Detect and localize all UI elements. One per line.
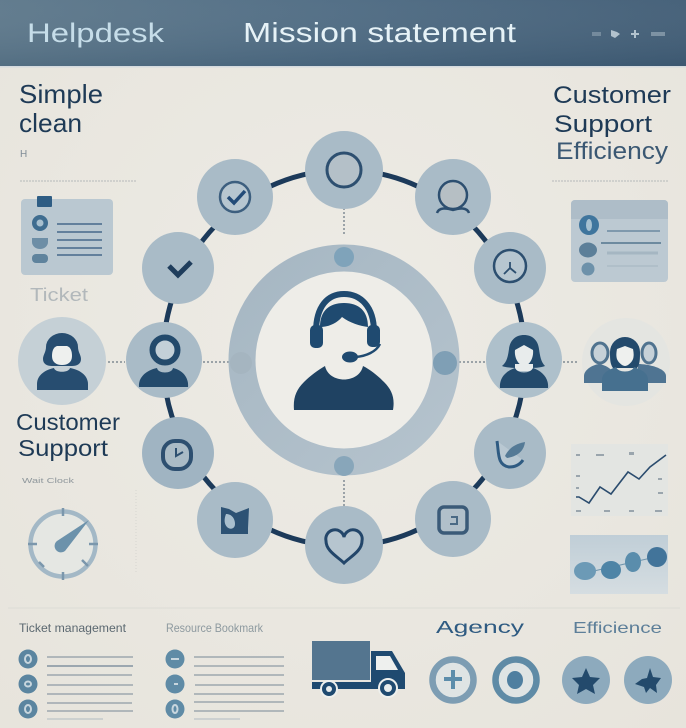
heading: Customer Support Efficiency: Customer	[553, 82, 671, 109]
node: check mark	[142, 232, 214, 304]
header title: Helpdesk: Helpdesk	[27, 18, 165, 48]
bottom list: management: Ticket management	[19, 621, 127, 635]
node: check circle	[197, 159, 273, 235]
label: Ticket: Ticket	[30, 285, 88, 305]
bottom badge: shield	[496, 660, 536, 700]
node: top shield	[305, 131, 383, 209]
label: Agency: Agency	[436, 617, 524, 637]
delivery truck icon	[312, 641, 405, 697]
heading: Customer Support: Customer	[16, 409, 120, 435]
bottom badge: star	[562, 656, 610, 704]
header bar	[0, 0, 686, 68]
blob chart panel	[570, 535, 668, 594]
customer avatar left	[18, 317, 106, 405]
outer orbit line	[163, 170, 525, 546]
heading: Customer Support Efficiency: Efficiency	[556, 138, 668, 165]
heading: Customer Support	[16, 409, 120, 461]
node: person right	[486, 322, 562, 398]
central ring	[242, 258, 446, 462]
bottom list: resources	[166, 621, 284, 719]
dotted divider left	[20, 180, 137, 182]
node: clock	[474, 232, 546, 304]
small glyph: H	[20, 149, 27, 160]
support dashboard card	[571, 200, 668, 282]
node: leaf badge	[197, 482, 273, 558]
heading: Customer Support Efficiency: Support	[554, 111, 652, 138]
bottom list: management	[18, 621, 133, 719]
bottom list: resources: Resource Bookmark	[166, 621, 264, 635]
central diagram	[108, 131, 578, 584]
small caption: Wait Clock	[22, 478, 75, 485]
node: clock badge	[142, 417, 214, 489]
ring nodes	[230, 247, 457, 476]
label: Efficience: Efficience	[573, 620, 662, 637]
heading: Customer Support: Support	[18, 435, 109, 461]
dotted guide	[135, 490, 137, 572]
bottom badge: plus	[432, 660, 474, 700]
gauge icon	[28, 508, 98, 580]
ticket card	[21, 196, 113, 275]
header title: Mission statement: Mission statement	[243, 17, 516, 48]
customer group avatar	[582, 318, 670, 406]
central agent icon	[294, 294, 394, 410]
header nav icons	[592, 30, 665, 38]
node: support person	[415, 159, 491, 235]
bottom badge: star arrow	[624, 656, 672, 704]
heading: Customer Support Efficiency	[553, 82, 671, 165]
node: person left	[126, 322, 202, 398]
line chart panel	[571, 444, 668, 516]
node: square badge	[415, 481, 491, 557]
node: heart	[305, 506, 383, 584]
heading: Simple clean: Simple	[19, 79, 103, 109]
dotted divider right	[552, 180, 669, 182]
bottom divider	[8, 607, 680, 609]
heading: Simple clean: clean	[19, 108, 82, 138]
heading: Simple clean	[19, 79, 103, 138]
dotted connectors	[108, 208, 578, 507]
node: leaf shield	[474, 417, 546, 489]
